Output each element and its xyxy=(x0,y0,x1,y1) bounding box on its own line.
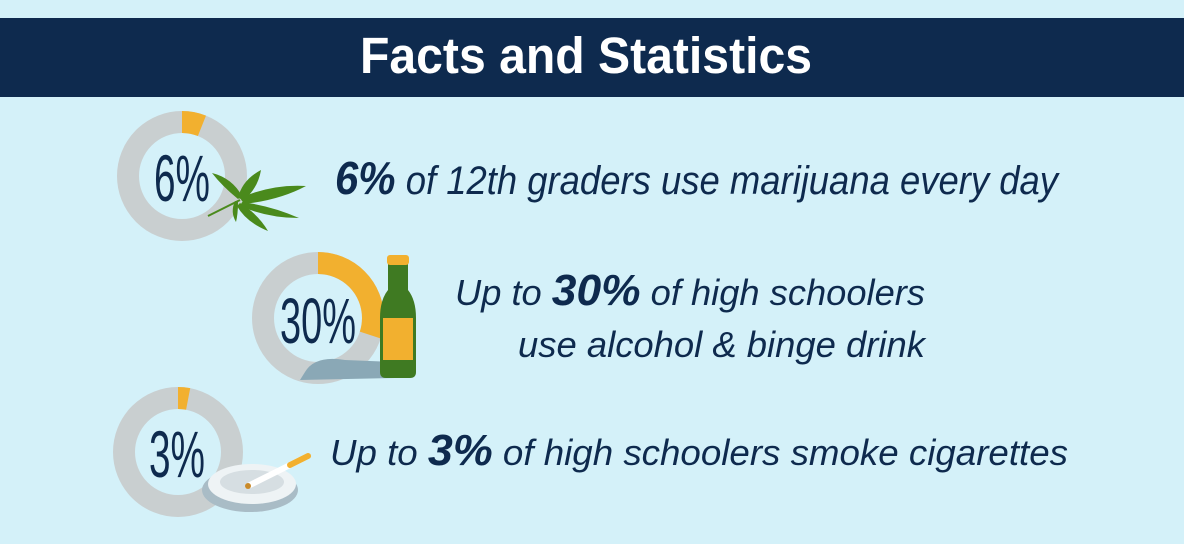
icon: ashtray with cigarette xyxy=(202,456,308,512)
header band xyxy=(0,18,1184,97)
icon: cannabis leaf xyxy=(208,170,306,231)
icon: bottle with shadow xyxy=(300,255,416,380)
donut chart: 3% xyxy=(124,398,232,506)
donut chart: 6% xyxy=(128,122,236,230)
stat text: alcohol: use alcohol & binge drink xyxy=(518,324,927,365)
stat text: marijuana: 6% of 12th graders use marijuana every day xyxy=(335,152,1061,204)
donut chart: 30%: 30% xyxy=(280,285,356,357)
donut chart: 6%: 6% xyxy=(154,141,210,215)
stat text: cigarettes: Up to 3% of high schoolers smoke cigarettes xyxy=(330,426,1068,475)
donut chart: 30% xyxy=(263,263,373,373)
stat text: alcohol: Up to 30% of high schoolers xyxy=(455,266,925,315)
title: Facts and Statistics xyxy=(360,27,812,84)
stat text: alcohol xyxy=(455,266,927,365)
donut chart: 3%: 3% xyxy=(149,417,205,491)
